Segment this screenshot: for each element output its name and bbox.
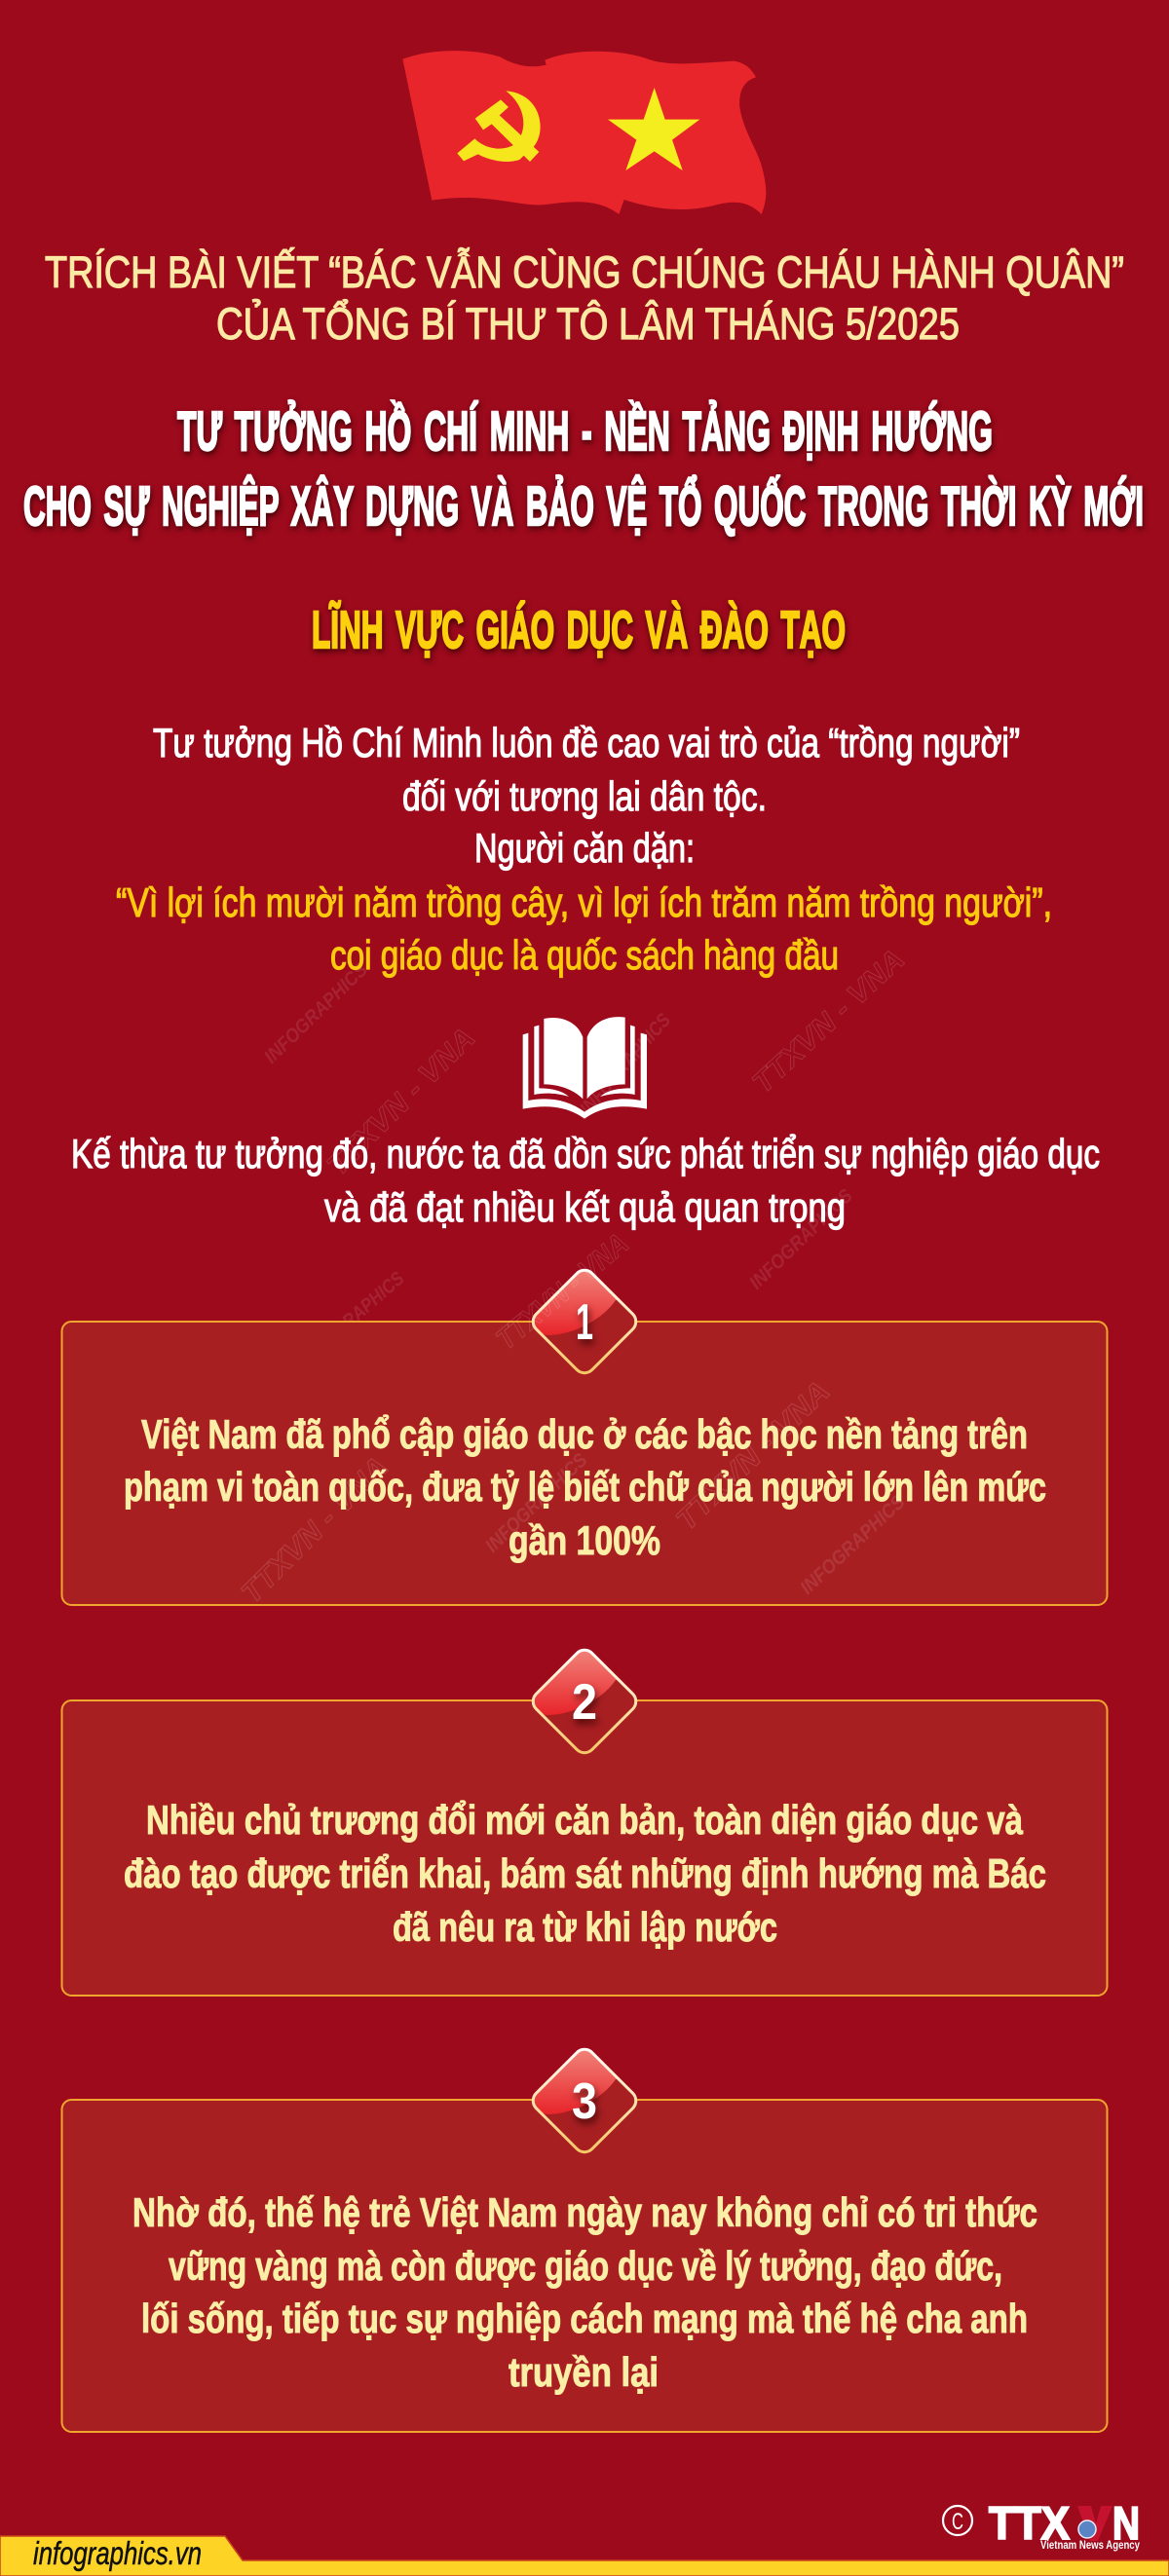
box 1 text: [124, 1411, 1046, 1563]
badge 3: [532, 2047, 637, 2154]
badge 2: 2: [572, 1674, 597, 1731]
watermarks over boxes: [236, 1227, 910, 1610]
footer bar: [0, 2535, 1169, 2576]
watermarks: INFOGRAPHICS: [745, 1184, 857, 1294]
copyright mark: C: [952, 2509, 963, 2535]
box 1 text: gần 100%: [509, 1517, 660, 1563]
icon: open book: [523, 1017, 647, 1119]
watermarks: INFOGRAPHICS: [260, 958, 372, 1068]
watermarks over boxes: TTXVN - VNA: [670, 1375, 836, 1537]
watermarks: TTXVN - VNA: [321, 1022, 481, 1182]
watermarks: INFOGRAPHICS: [576, 1009, 675, 1119]
badge 3: 3: [572, 2073, 597, 2130]
intro text: Người căn dặn:: [474, 825, 695, 871]
logo: TTXVN: [943, 2497, 1141, 2552]
panel: box 2: [62, 1700, 1107, 1996]
logo: TTXVN: TTX: [989, 2497, 1070, 2549]
badge 2: [532, 1648, 637, 1755]
copyright mark: [943, 2506, 972, 2535]
panel: box 3: [62, 2100, 1107, 2432]
watermarks over boxes: TTXVN - VNA: [236, 1451, 395, 1610]
box 3 text: [132, 2189, 1037, 2395]
conclusion text: và đã đạt nhiều kết quả quan trọng: [324, 1184, 846, 1230]
icon: flag: [402, 51, 766, 214]
intro text: đối với tương lai dân tộc.: [402, 773, 767, 819]
watermarks: INFOGRAPHICS: [299, 1268, 409, 1367]
box 2 text: đã nêu ra từ khi lập nước: [393, 1904, 777, 1950]
badge 1: 1: [576, 1294, 593, 1351]
title: article source: [45, 247, 1124, 349]
badge 1: [532, 1268, 637, 1375]
conclusion text: [71, 1131, 1100, 1230]
logo: TTXVN: N: [1112, 2497, 1140, 2549]
quote: coi giáo dục là quốc sách hàng đầu: [330, 932, 839, 978]
quote: [116, 879, 1052, 978]
icon: hammer and sickle: [457, 91, 541, 162]
logo: TTXVN: Vietnam News Agency: [1040, 2540, 1141, 2552]
intro text: [153, 720, 1020, 871]
watermarks over boxes: INFOGRAPHICS: [796, 1491, 910, 1599]
box 3 text: truyền lại: [509, 2349, 659, 2395]
watermarks: TTXVN - VNA: [746, 944, 911, 1100]
main heading: [23, 399, 1144, 538]
title: article source: CỦA TỔNG BÍ THƯ TÔ LÂM THÁNG 5/2025: [216, 299, 960, 349]
panel: box 1: [62, 1322, 1107, 1605]
watermarks over boxes: TTXVN - VNA: [490, 1227, 635, 1356]
watermarks: [260, 944, 911, 1367]
watermarks over boxes: INFOGRAPHICS: [481, 1449, 592, 1557]
box 2 text: [124, 1797, 1046, 1950]
footer site name: infographics.vn: [33, 2535, 202, 2571]
icon: star: [608, 88, 699, 170]
